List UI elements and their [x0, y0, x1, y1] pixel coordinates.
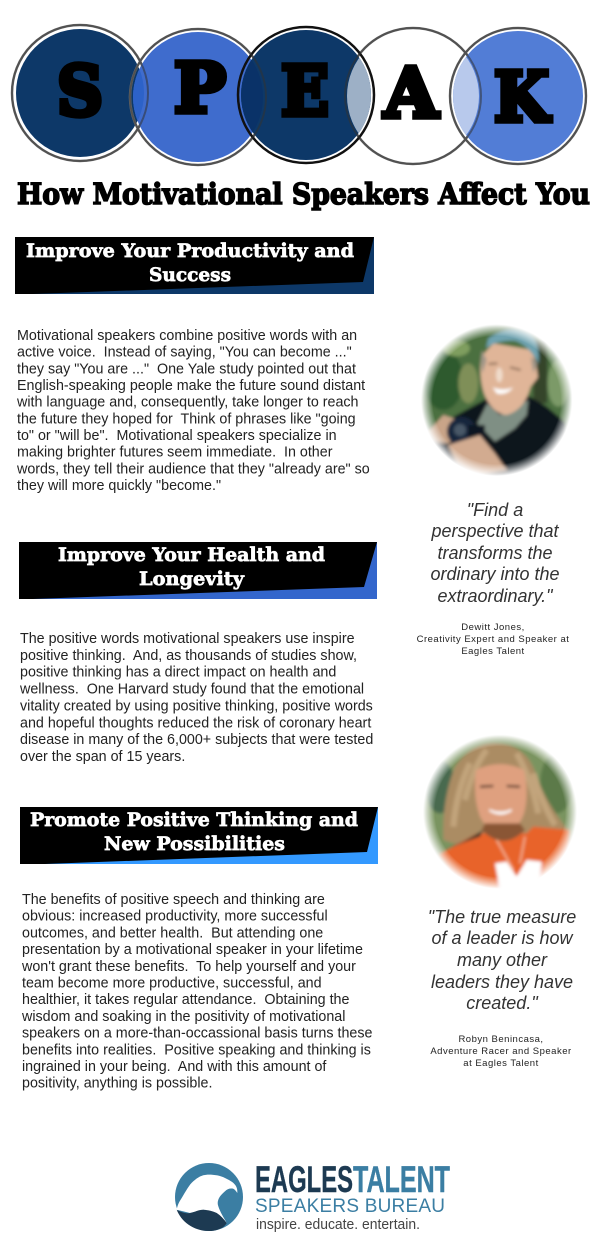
- text block: positive thinking: benefits into realities. Positive speaking and thinking is: [22, 1042, 371, 1058]
- text block: productivity: Motivational speakers combine positive words with an: [17, 328, 357, 344]
- attribution: Robyn Benincasa: at Eagles Talent: [463, 1058, 539, 1069]
- overlap ring lines: [12, 25, 586, 165]
- text block: productivity: making brighter futures seem immediate. In other: [17, 445, 333, 461]
- letters: K: [494, 58, 552, 138]
- text block: health: and hopeful thoughts reduced the risk of coronary heart: [20, 715, 371, 731]
- text block: positive thinking: outcomes, and better health. But attending one: [22, 925, 323, 941]
- text block: positive thinking: presentation by a motivational speaker in your lifetime: [22, 942, 363, 958]
- text block: positive thinking: positivity, anything is possible.: [22, 1076, 212, 1092]
- quote: Robyn Benincasa: created.": [466, 993, 539, 1013]
- text block: positive thinking: healthier, it takes regular attendance. Obtaining the: [22, 992, 350, 1008]
- attribution: Robyn Benincasa: Adventure Racer and Speaker: [430, 1046, 572, 1057]
- quote: Robyn Benincasa: of a leader is how: [431, 928, 574, 948]
- quote: Robyn Benincasa: many other: [457, 950, 548, 970]
- text block: health: vitality created by using positive thinking, positive words: [20, 698, 373, 714]
- text block: productivity: the future they hoped for Think of phrases like "going: [17, 411, 356, 427]
- banner: positive thinking: Promote Positive Thinking and: [30, 809, 358, 831]
- photo: Dewitt Jones: [422, 325, 572, 476]
- banner: productivity: Success: [149, 264, 231, 286]
- photo: Robyn Benincasa: [424, 736, 576, 888]
- letters: [57, 49, 552, 138]
- text block: productivity: to" or "will be". Motivational speakers specialize in: [17, 428, 337, 444]
- attribution: Dewitt Jones: Dewitt Jones,: [461, 622, 525, 633]
- text block: health: positive thinking. And, as thousands of studies show,: [20, 648, 357, 664]
- quote: Dewitt Jones: "Find a: [467, 500, 523, 520]
- wordmark: [255, 1159, 450, 1233]
- quote: Dewitt Jones: ordinary into the: [430, 564, 560, 584]
- banner: productivity: Improve Your Productivity and: [26, 240, 354, 262]
- text block: health: disease in many of the 6,000+ subjects that were tested: [20, 732, 373, 748]
- banner: health: Improve Your Health and: [58, 544, 325, 566]
- text block: positive thinking: ingrained in your being. And with this amount of: [22, 1059, 326, 1075]
- banner: health: Longevity: [139, 568, 245, 590]
- wordmark: TALENT: [353, 1159, 450, 1200]
- attribution: Dewitt Jones: Eagles Talent: [461, 646, 525, 657]
- letters: S: [57, 52, 103, 132]
- text block: productivity: they will more quickly "become.": [17, 478, 221, 494]
- circle K: [448, 26, 588, 166]
- SPEAK circle logo: [12, 25, 586, 165]
- text block: health: wellness. One Harvard study found that the emotional: [19, 682, 364, 698]
- logo: Eagles Talent: [175, 1159, 450, 1233]
- text block: positive thinking: The benefits of positive speech and thinking are: [22, 892, 325, 908]
- attribution: Dewitt Jones: Creativity Expert and Speaker at: [417, 634, 569, 645]
- text block: positive thinking: speakers on a more-than-occassional basis turns these: [22, 1026, 373, 1042]
- circle A: [345, 28, 481, 164]
- text block: productivity: they say "You are ..." One Yale study pointed out that: [17, 361, 356, 377]
- letters: P: [174, 49, 226, 129]
- text block: health: positive thinking has a direct impact on health and: [20, 665, 336, 681]
- banner: health: [19, 542, 377, 599]
- text block: productivity: with language and, consequently, take longer to reach: [16, 395, 359, 411]
- quote: Dewitt Jones: extraordinary.": [437, 586, 554, 606]
- wordmark: EAGLES: [255, 1159, 353, 1200]
- text block: positive thinking: wisdom and soaking in the positivity of motivational: [21, 1009, 345, 1025]
- text block: productivity: English-speaking people make the future sound distant: [17, 378, 365, 394]
- text block: health: over the span of 15 years.: [20, 749, 185, 765]
- text block: positive thinking: won't grant these benefits. To help yourself and your: [21, 959, 356, 975]
- circle S: [12, 25, 148, 161]
- circle P: [128, 28, 256, 166]
- wordmark: inspire. educate. entertain.: [256, 1216, 420, 1233]
- quote: Dewitt Jones: transforms the: [437, 543, 553, 563]
- banner: productivity: [15, 237, 374, 294]
- wordmark: SPEAKERS BUREAU: [255, 1196, 445, 1217]
- attribution: Robyn Benincasa: Robyn Benincasa,: [458, 1034, 544, 1045]
- text block: health: The positive words motivational speakers use inspire: [20, 631, 355, 647]
- letters: E: [281, 52, 329, 132]
- circle E: [236, 26, 376, 164]
- text block: productivity: active voice. Instead of saying, "You can become ...": [17, 345, 352, 361]
- icon: eagle: [175, 1163, 243, 1231]
- quote: Dewitt Jones: perspective that: [430, 521, 560, 541]
- banner: positive thinking: [20, 807, 378, 864]
- letters: A: [383, 54, 439, 134]
- text block: productivity: words, they tell their audience that they "already are" so: [16, 461, 370, 477]
- banner: positive thinking: New Possibilities: [104, 833, 285, 855]
- text block: positive thinking: obvious: increased productivity, more successful: [22, 909, 328, 925]
- quote: Robyn Benincasa: leaders they have: [431, 972, 573, 992]
- text block: positive thinking: team become more productive, successful, and: [22, 976, 322, 992]
- quote: Robyn Benincasa: "The true measure: [428, 907, 576, 927]
